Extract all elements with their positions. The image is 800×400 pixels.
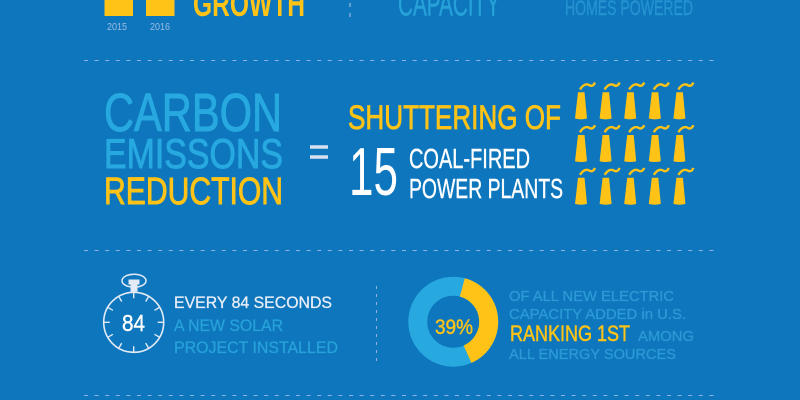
heading: carbon emissions reduction: CARBON <box>104 83 282 143</box>
icon: stopwatch 84 <box>104 274 164 352</box>
text: ranking <box>509 289 694 363</box>
bar chart: growth 2015 to 2016: 2016 <box>150 22 170 33</box>
text: every 84 seconds <box>174 293 338 357</box>
text: ranking: ALL ENERGY SOURCES <box>509 347 676 363</box>
bar chart: growth 2015 to 2016: 2015 <box>107 22 127 33</box>
text: shuttering of 15 coal-fired power plants: SHUTTERING OF <box>348 99 561 137</box>
text: every 84 seconds: A NEW SOLAR <box>174 316 283 335</box>
text: shuttering of 15 coal-fired power plants: COAL-FIRED <box>409 143 530 174</box>
text: ranking: CAPACITY ADDED in U.S. <box>509 307 686 323</box>
heading: carbon emissions reduction: REDUCTION <box>104 171 283 213</box>
text: ranking: AMONG <box>638 329 694 345</box>
text: ranking: OF ALL NEW ELECTRIC <box>509 289 674 305</box>
heading: carbon emissions reduction: EMISSONS <box>104 130 283 177</box>
text: every 84 seconds: PROJECT INSTALLED <box>174 338 338 357</box>
donut chart: 39%: 39% <box>435 316 473 339</box>
bar chart: growth 2015 to 2016 <box>104 0 174 33</box>
text: shuttering of 15 coal-fired power plants: POWER PLANTS <box>409 173 563 204</box>
text: every 84 seconds: EVERY 84 SECONDS <box>174 293 332 312</box>
heading: carbon emissions reduction <box>104 83 283 213</box>
donut chart: 39% <box>418 286 489 357</box>
equals sign <box>310 147 328 157</box>
divider top <box>349 3 351 17</box>
icons: 15 coal plant smokestacks <box>575 82 693 205</box>
text: shuttering of 15 coal-fired power plants: 15 <box>349 134 398 210</box>
text: shuttering of 15 coal-fired power plants <box>348 99 563 210</box>
text: ranking: RANKING 1ST <box>510 321 630 346</box>
icon: stopwatch 84: 84 <box>122 310 145 336</box>
